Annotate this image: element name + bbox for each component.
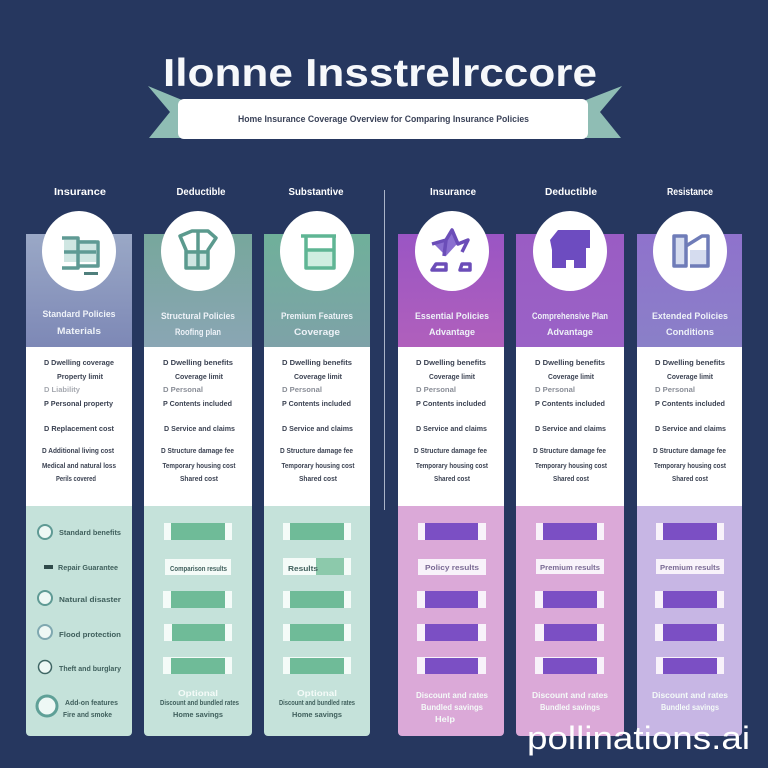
header panel <box>398 234 504 347</box>
bullet list: Temporary housing cost <box>282 461 355 470</box>
footer note: Help <box>435 715 455 724</box>
bullet list: D Service and claims <box>655 424 726 433</box>
bullet list: D Dwelling benefits <box>535 358 605 367</box>
bullet list <box>280 358 355 483</box>
header caption: Premium Features <box>281 311 353 322</box>
feature list with icons <box>37 525 122 719</box>
lower panel <box>26 506 132 736</box>
bullet list <box>42 358 116 483</box>
header panel <box>516 234 624 347</box>
bullet list: Temporary housing cost <box>162 461 236 470</box>
bullet list: Shared cost <box>434 474 470 483</box>
watermark: pollinations.ai <box>527 720 750 756</box>
header caption <box>161 311 235 338</box>
rating bars <box>417 523 486 674</box>
bullet list: Coverage limit <box>294 372 342 381</box>
icon: scale <box>415 211 489 291</box>
bullet list: D Additional living cost <box>42 446 114 455</box>
header caption <box>42 309 116 337</box>
bullet list <box>653 358 726 483</box>
header caption <box>652 311 728 338</box>
footer note <box>652 691 729 712</box>
feature list with icons: Standard benefits <box>59 528 121 537</box>
bullet list: P Personal property <box>44 399 114 408</box>
icon: house <box>42 211 116 291</box>
column heading: Insurance <box>54 187 106 198</box>
footer note: Discount and rates <box>652 691 729 700</box>
feature list with icons: Theft and burglary <box>59 664 122 673</box>
rating bars <box>283 523 351 674</box>
banner panel <box>178 99 588 139</box>
icon: building <box>161 211 235 291</box>
bullet list: D Dwelling benefits <box>163 358 233 367</box>
footer note: Home savings <box>173 710 223 719</box>
bullet list: Shared cost <box>299 474 337 483</box>
icon: house silhouette <box>533 211 607 291</box>
header panel <box>26 234 132 347</box>
footer note <box>532 691 609 712</box>
footer note <box>160 689 239 719</box>
bullet list: Perils covered <box>56 474 96 483</box>
feature list with icons: Flood protection <box>59 630 121 639</box>
column heading: Deductible <box>176 187 226 198</box>
header caption: Extended Policies <box>652 311 728 322</box>
bullet list: D Structure damage fee <box>280 446 353 455</box>
header caption: Standard Policies <box>42 309 116 320</box>
header caption <box>532 311 608 338</box>
white list panel <box>26 347 132 507</box>
header caption: Advantage <box>429 327 475 338</box>
white list panel <box>398 347 504 507</box>
rating bars: Premium results <box>660 563 720 572</box>
bullet list: D Personal <box>163 385 203 394</box>
bullet list: Shared cost <box>672 474 708 483</box>
column 2 <box>144 187 252 736</box>
footer note: Optional <box>178 689 218 698</box>
header panel <box>264 234 370 347</box>
rating bars: Results <box>288 564 318 573</box>
footer note: Bundled savings <box>421 703 484 712</box>
lower panel <box>637 506 742 736</box>
footer note: Discount and rates <box>532 691 609 700</box>
feature list with icons: Add-on features <box>65 698 118 707</box>
ribbon banner <box>148 86 622 139</box>
feature list with icons: Fire and smoke <box>63 710 112 719</box>
bullet list: D Service and claims <box>535 424 606 433</box>
header panel <box>637 234 742 347</box>
bullet list: D Structure damage fee <box>653 446 726 455</box>
bullet list: Coverage limit <box>175 372 223 381</box>
header caption: Conditions <box>666 327 714 338</box>
header caption: Structural Policies <box>161 311 235 322</box>
header caption: Advantage <box>547 327 593 338</box>
bullet list: D Dwelling coverage <box>44 358 114 367</box>
header caption: Materials <box>57 326 101 337</box>
lower panel <box>398 506 504 736</box>
bullet list <box>414 358 488 483</box>
icon: open book <box>653 211 727 291</box>
bullet list: D Service and claims <box>164 424 235 433</box>
white list panel <box>264 347 370 507</box>
column heading: Deductible <box>545 187 597 198</box>
bullet list: D Personal <box>655 385 695 394</box>
bullet list: P Contents included <box>655 399 725 408</box>
icon: storefront <box>280 211 354 291</box>
footer note: Bundled savings <box>540 703 601 712</box>
rating bars: Policy results <box>425 563 479 572</box>
bullet list: Shared cost <box>180 474 218 483</box>
bullet list: Shared cost <box>553 474 589 483</box>
title: Ilonne Insstrelrccore <box>163 52 597 95</box>
bullet list: D Personal <box>282 385 322 394</box>
column heading: Substantive <box>288 187 344 198</box>
column 3 <box>264 187 370 736</box>
bullet list: Temporary housing cost <box>535 461 607 470</box>
header caption: Coverage <box>294 327 340 338</box>
white list panel <box>144 347 252 507</box>
rating bars: Comparison results <box>170 564 227 573</box>
bullet list: D Structure damage fee <box>161 446 234 455</box>
bullet list: P Contents included <box>163 399 232 408</box>
bullet list: P Contents included <box>535 399 605 408</box>
bullet list: D Service and claims <box>416 424 487 433</box>
feature list with icons: Repair Guarantee <box>58 563 118 572</box>
header caption: Roofing plan <box>175 327 221 338</box>
column heading: Resistance <box>667 187 713 198</box>
bullet list <box>533 358 607 483</box>
footer note <box>416 691 489 724</box>
rating bars <box>535 523 604 674</box>
header caption <box>415 311 489 338</box>
ribbon tail: right <box>586 86 622 138</box>
bullet list: Property limit <box>57 372 103 381</box>
header caption: Comprehensive Plan <box>532 311 608 322</box>
bullet list: Temporary housing cost <box>416 461 488 470</box>
rating bars: Premium results <box>540 563 600 572</box>
header panel <box>144 234 252 347</box>
bullet list: D Dwelling benefits <box>416 358 486 367</box>
bullet list: D Structure damage fee <box>533 446 606 455</box>
lower panel <box>264 506 370 736</box>
feature list with icons: Natural disaster <box>59 595 121 604</box>
footer note: Optional <box>297 689 337 698</box>
column 5 <box>516 187 624 736</box>
lower panel <box>516 506 624 736</box>
bullet list: Temporary housing cost <box>654 461 726 470</box>
footer note: Discount and bundled rates <box>160 698 239 707</box>
white list panel <box>637 347 742 507</box>
footer note: Discount and bundled rates <box>279 698 355 707</box>
bullet list: D Service and claims <box>282 424 353 433</box>
header caption: Essential Policies <box>415 311 489 322</box>
column 4 <box>398 187 504 736</box>
ribbon tail: left <box>148 86 182 138</box>
center divider <box>384 190 385 510</box>
bullet list <box>161 358 236 483</box>
banner subtitle: Home Insurance Coverage Overview for Comparing Insurance Policies <box>238 114 529 124</box>
header caption <box>281 311 353 338</box>
white list panel <box>516 347 624 507</box>
footer note <box>279 689 355 719</box>
rating bars <box>163 523 232 674</box>
bullet list: D Replacement cost <box>44 424 114 433</box>
bullet list: Coverage limit <box>667 372 713 381</box>
bullet list: P Contents included <box>416 399 486 408</box>
bullet list: Medical and natural loss <box>42 461 116 470</box>
bullet list: Coverage limit <box>548 372 594 381</box>
bullet list: D Liability <box>44 385 81 394</box>
column 6 <box>637 187 742 736</box>
column heading: Insurance <box>430 187 476 198</box>
bullet list: P Contents included <box>282 399 351 408</box>
bullet list: D Personal <box>535 385 575 394</box>
footer note: Discount and rates <box>416 691 489 700</box>
footer note: Home savings <box>292 710 342 719</box>
bullet list: Coverage limit <box>429 372 475 381</box>
bullet list: D Dwelling benefits <box>282 358 352 367</box>
bullet list: D Structure damage fee <box>414 446 487 455</box>
footer note: Bundled savings <box>661 703 719 712</box>
column 1 <box>26 187 132 736</box>
bullet list: D Personal <box>416 385 456 394</box>
rating bars <box>655 523 724 674</box>
lower panel <box>144 506 252 736</box>
bullet list: D Dwelling benefits <box>655 358 725 367</box>
